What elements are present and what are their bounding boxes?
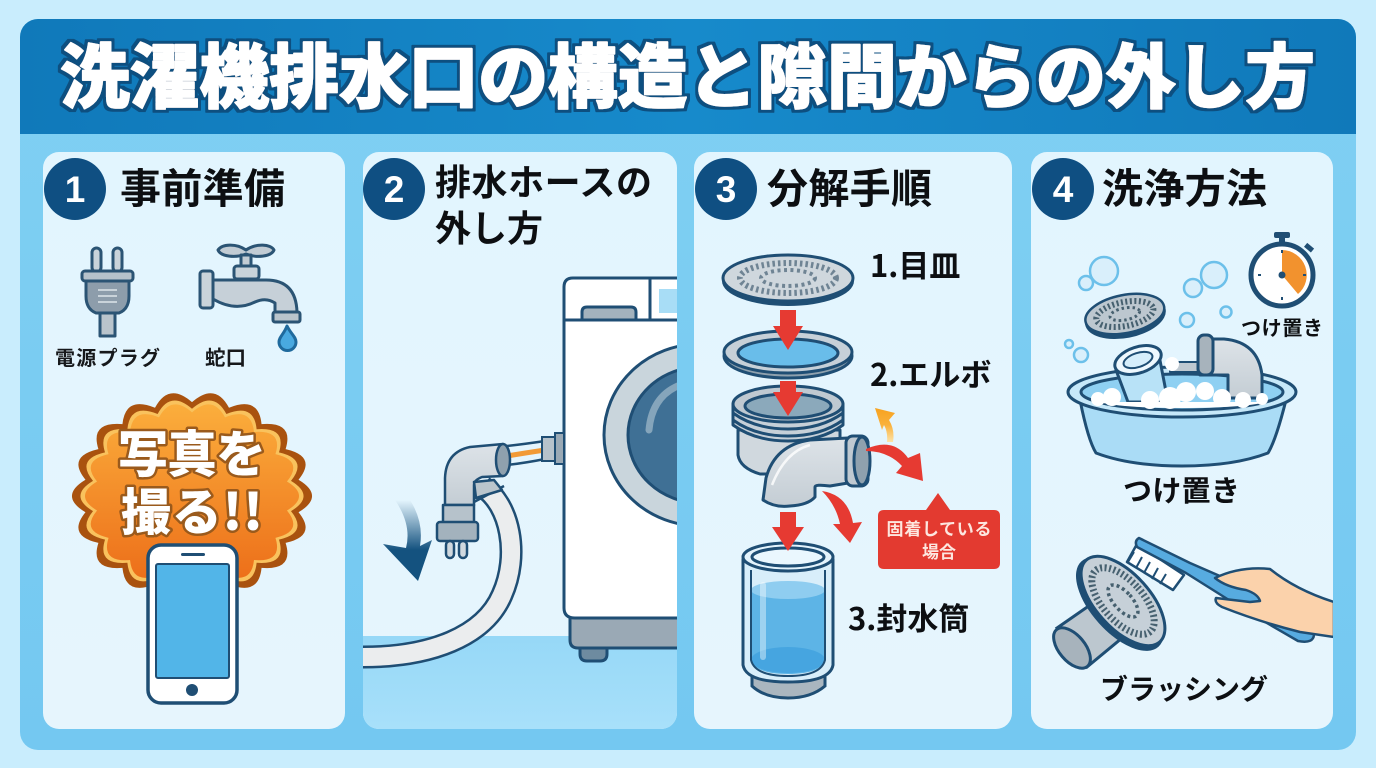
label: brushing: ブラッシング	[1100, 668, 1268, 708]
arrow: red down 2	[773, 381, 803, 416]
illustration: soaking basin	[1068, 335, 1296, 466]
header band	[20, 19, 1356, 134]
illustration: strainer plate	[722, 255, 854, 306]
arrow: red down 1	[773, 310, 803, 350]
callout: when stuck	[878, 493, 1000, 569]
illustration: elbow ring	[724, 331, 852, 378]
step 4 heading: 洗浄方法	[1102, 155, 1267, 215]
step 4 number badge	[1032, 158, 1094, 220]
arrow: orange up	[875, 408, 895, 442]
callout badge: take a photo	[72, 393, 312, 599]
step 1 number badge	[44, 158, 106, 220]
panel: step 2 hose removal	[363, 152, 677, 729]
label: faucet: 蛇口	[205, 341, 246, 371]
illustration: brush in hand	[1127, 538, 1334, 642]
illustration: floating strainer	[1081, 288, 1170, 345]
step 2 heading: 外し方	[435, 200, 543, 252]
label: elbow: 2.エルボ	[870, 350, 991, 395]
arrow: pull hose downward	[383, 500, 432, 581]
illustration: drain hose outlet	[507, 433, 564, 465]
illustration: hose elbow	[437, 444, 510, 558]
callout: when stuck: 固着している	[886, 515, 992, 540]
icon: power plug	[82, 248, 133, 336]
step 2 heading: 排水ホースの	[435, 154, 652, 206]
label: seal cup: 3.封水筒	[848, 594, 969, 639]
label: power plug: 電源プラグ	[55, 342, 160, 371]
bubbles	[1065, 257, 1232, 362]
soap foam	[1091, 357, 1268, 409]
step 2 number badge: 2	[384, 169, 404, 210]
label: soak timer: つけ置き	[1241, 312, 1323, 341]
icon: smartphone	[148, 545, 237, 703]
panel: step 4 cleaning	[1031, 152, 1334, 729]
panel: step 1 preparation	[43, 152, 345, 729]
arrow: red curved down	[822, 491, 862, 543]
title: 洗濯機排水口の構造と隙間からの外し方	[60, 22, 1315, 123]
callout badge: take a photo: 写真を	[118, 415, 266, 487]
step 2 number badge	[363, 158, 425, 220]
illustration: seal cup	[743, 543, 833, 698]
illustration: drain hose	[363, 486, 511, 657]
illustration: threaded drain body with elbow	[733, 386, 870, 506]
floor	[363, 636, 677, 729]
illustration: strainer with pipe	[1047, 542, 1180, 675]
step 3 heading: 分解手順	[767, 155, 932, 215]
step 3 number badge: 3	[716, 169, 736, 210]
callout: when stuck: 場合	[922, 538, 956, 563]
illustration: washing machine	[562, 276, 677, 662]
icon: faucet with drop	[200, 245, 300, 350]
label: strainer plate: 1.目皿	[870, 241, 960, 286]
icon: stopwatch	[1251, 232, 1314, 306]
callout badge: take a photo: 撮る!!	[121, 473, 263, 545]
arrow: red curved to callout	[866, 445, 923, 481]
step 1 heading: 事前準備	[120, 155, 285, 215]
label: soak: つけ置き	[1123, 468, 1240, 510]
panel: step 3 disassembly	[694, 152, 1012, 729]
step 4 number badge: 4	[1053, 169, 1074, 210]
arrow: red down 3	[772, 512, 804, 551]
step 1 number badge: 1	[65, 169, 85, 210]
step 3 number badge	[695, 158, 757, 220]
